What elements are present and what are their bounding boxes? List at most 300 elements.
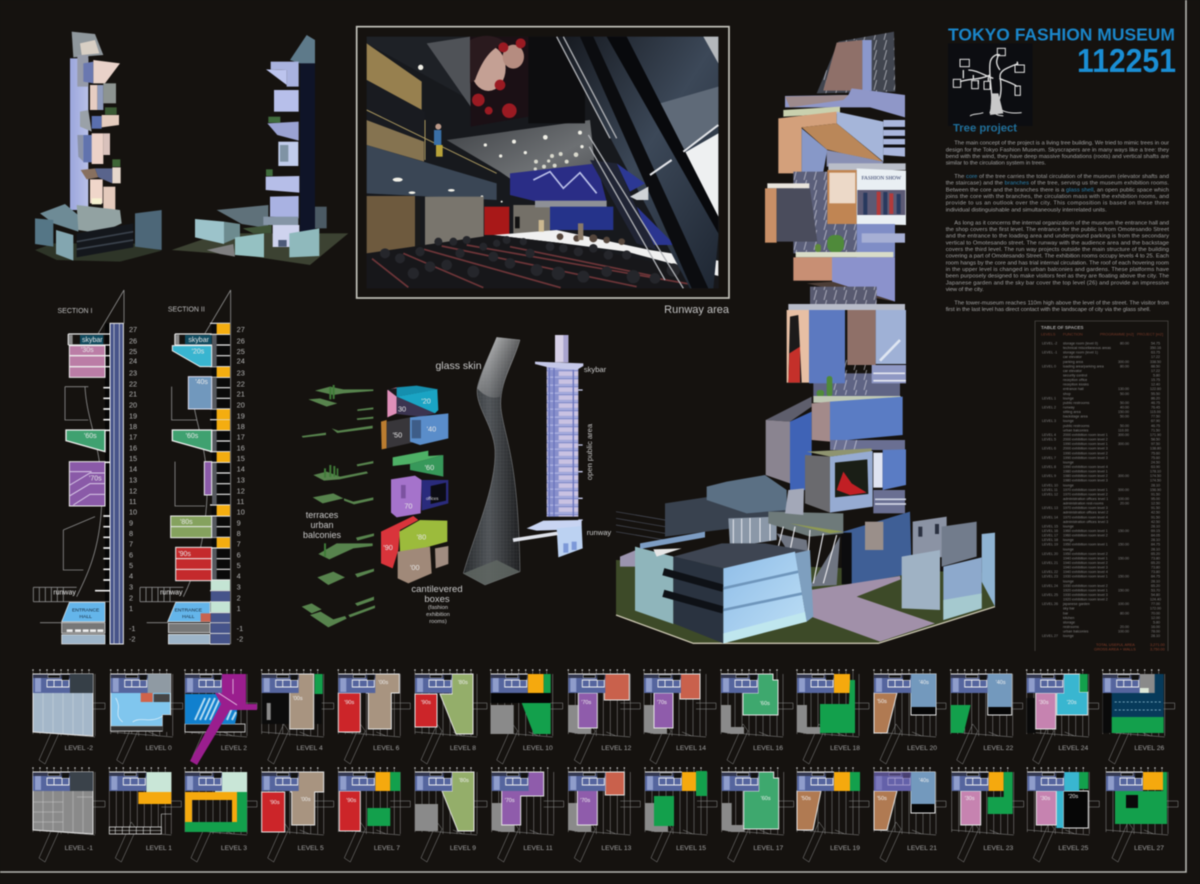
- section II: 12: [237, 486, 245, 495]
- section I: 12: [129, 486, 137, 495]
- boxes 20s and 30s: '20: [421, 396, 431, 405]
- site and base buildings: [616, 475, 995, 643]
- table of spaces: 1970 exhibition room level 2: [1063, 492, 1108, 496]
- table of spaces: 46.75: [1151, 401, 1160, 405]
- table of spaces: 300.00: [1118, 442, 1129, 446]
- table of spaces: 73.80: [1151, 556, 1160, 560]
- box 60s: '60: [425, 463, 434, 472]
- section II: 16: [237, 443, 245, 452]
- box 60s: [393, 451, 443, 477]
- section II: 17: [237, 432, 245, 441]
- table of spaces: LEVEL 14: [1042, 515, 1058, 519]
- project description: joins the core with the branches, the circulation mass with the exhibition rooms, and: [945, 194, 1169, 200]
- plan: level 23: [951, 767, 1024, 862]
- table of spaces: 58.50: [1151, 438, 1160, 442]
- boxes 40s and 50s: [381, 413, 448, 449]
- project description: The tower-museum reaches 110m high above the level of the street. The visitor from: [954, 300, 1169, 306]
- label: cantilevered boxes: cantilevered: [411, 584, 463, 595]
- project description: been purposely designed to make visitors feel as they are floating above the city. The: [946, 274, 1169, 280]
- section I: ENTRANCE: [72, 608, 100, 614]
- table of spaces: LEVEL 3: [1042, 419, 1056, 423]
- tower middle part: [766, 310, 906, 513]
- table of spaces: 1960 exhibition room level 2: [1063, 534, 1108, 538]
- plan: level 8: LEVEL 8: [450, 745, 476, 752]
- section I: [33, 290, 137, 644]
- table of spaces: storage room (level 1): [1063, 351, 1098, 355]
- plan: level -2: LEVEL -2: [65, 745, 93, 752]
- table of spaces: 100.00: [1118, 602, 1129, 606]
- plan: level 7: LEVEL 7: [374, 845, 400, 852]
- title: TOKYO FASHION MUSEUM: [948, 24, 1175, 44]
- table of spaces: 150.00: [1118, 543, 1129, 547]
- plan: level 6: '00s: [378, 680, 388, 686]
- table of spaces: 75.60: [1151, 456, 1160, 460]
- plan: level 0: LEVEL 0: [146, 745, 172, 752]
- plan: level 10: [490, 669, 563, 764]
- table of spaces: 76.45: [1151, 406, 1160, 410]
- label: glass skin: glass skin: [435, 360, 482, 372]
- table of spaces: 91.50: [1151, 506, 1160, 510]
- section II: runway: [160, 590, 183, 597]
- plan: level 5: '90s: [270, 800, 280, 806]
- plan: level 24: [1026, 669, 1099, 764]
- exploded diagram: cantilevered boxes: [381, 386, 448, 583]
- label: skybar: skybar: [584, 365, 607, 374]
- plan: level 6: '90s: [344, 700, 354, 706]
- table of spaces: 138.80: [1150, 447, 1161, 451]
- plan: level 7: [338, 767, 410, 862]
- table of spaces: 28.10: [1151, 634, 1160, 638]
- table of spaces: 77.50: [1151, 415, 1160, 419]
- table of spaces: 1940 exhibition room level 1: [1063, 556, 1108, 560]
- table of spaces: 2000 exhibition room level 2: [1063, 438, 1108, 442]
- table of spaces: urban balconies: [1063, 630, 1089, 634]
- plan: level 3: LEVEL 3: [221, 845, 247, 852]
- section I: 5: [129, 561, 133, 570]
- floor plans, odd levels: [32, 767, 1178, 862]
- plan: level 22: [950, 669, 1023, 764]
- plan: level 19: '50s: [801, 796, 811, 802]
- table of spaces: 1960 exhibition room level 1: [1063, 529, 1108, 533]
- table of spaces: LEVEL 0: [1042, 364, 1056, 368]
- table of spaces: 55.50: [1151, 392, 1160, 396]
- table of spaces: restrooms: [1063, 625, 1079, 629]
- section drawings: [33, 290, 245, 644]
- section II: 21: [237, 390, 245, 399]
- table of spaces: 84.05: [1151, 534, 1160, 538]
- section I: 23: [129, 368, 137, 377]
- section II: 3: [237, 582, 241, 591]
- table of spaces: 54.80: [1151, 593, 1160, 597]
- table of spaces: 40.00: [1120, 406, 1129, 410]
- table of spaces: 1950 exhibition room level 2: [1063, 552, 1108, 556]
- table of spaces: 65.20: [1151, 561, 1160, 565]
- plan: level 14: LEVEL 14: [676, 745, 706, 752]
- plan: level 18: [796, 669, 869, 764]
- project description: The core of the tree carries the total circulation of the museum (elevator shafts and: [954, 174, 1169, 180]
- table of spaces: LEVEL 18: [1042, 538, 1058, 542]
- table of spaces: 20.00: [1120, 502, 1129, 506]
- table of spaces: LEVELS: [1041, 332, 1056, 336]
- table of spaces: 178.10: [1150, 470, 1161, 474]
- table of spaces: 73.80: [1151, 566, 1160, 570]
- project description: As long as it concerns the internal organization of the museum the entrance hall and: [954, 220, 1169, 226]
- section I: 18: [129, 422, 137, 431]
- table of spaces: 88.50: [1151, 364, 1160, 368]
- table of spaces: 174.50: [1150, 479, 1161, 483]
- table of spaces: 80.00: [1120, 342, 1129, 346]
- table of spaces: TABLE OF SPACES: [1041, 325, 1083, 330]
- plan: level 20: '50s: [877, 699, 887, 705]
- table of spaces: LEVEL 1: [1042, 396, 1056, 400]
- table of spaces: 300.00: [1118, 488, 1129, 492]
- table of spaces: 1970 exhibition room level 3: [1063, 506, 1108, 510]
- plan: level 24: '30s: [1039, 700, 1049, 706]
- plan: level 13: LEVEL 13: [601, 845, 632, 852]
- table of spaces: 28.10: [1151, 579, 1160, 583]
- section II: 9: [237, 518, 241, 527]
- table of spaces: 130.00: [1118, 387, 1129, 391]
- table of spaces: 1920 exhibition room level 1: [1063, 588, 1108, 592]
- plan: level 12: '70s: [581, 700, 591, 706]
- table of spaces: LEVEL 9: [1042, 474, 1056, 478]
- table of spaces: 1930 exhibition room level 3: [1063, 593, 1108, 597]
- label: terraces urban balconies: urban: [310, 520, 334, 530]
- section I: 4: [129, 572, 133, 581]
- section I: SECTION I: [58, 308, 93, 315]
- exploded diagram: terraces, urban balconies: [302, 385, 375, 627]
- table of spaces: LEVEL 7: [1042, 456, 1056, 460]
- section II: 26: [237, 336, 245, 345]
- section I: 11: [129, 497, 137, 506]
- table of spaces: 174.50: [1150, 474, 1161, 478]
- table of spaces: 70.00: [1151, 611, 1160, 615]
- table of spaces: 1970 exhibition room level 4: [1063, 515, 1108, 519]
- tower upper part: [765, 32, 906, 310]
- plan: level 1: LEVEL 1: [146, 845, 172, 852]
- section II: 15: [237, 454, 245, 463]
- table of spaces: 100.00: [1118, 630, 1129, 634]
- table of spaces: 1990 exhibition room level 1: [1063, 442, 1108, 446]
- plan: level 8: [414, 669, 487, 764]
- table of spaces: TOTAL USEFUL AREA: [1096, 643, 1135, 647]
- table of spaces: 1970 exhibition room level 1: [1063, 488, 1108, 492]
- project description: Between the core and the branches there is a glass shell, an open public space which: [946, 187, 1169, 193]
- table of spaces: 53.70: [1151, 588, 1160, 592]
- plan: level 4: LEVEL 4: [297, 745, 323, 752]
- table of spaces: 3,750.00: [1150, 648, 1165, 652]
- plan: level 17: '60s: [761, 796, 771, 802]
- table of spaces: LEVEL 8: [1042, 465, 1056, 469]
- table of spaces: LEVEL 4: [1042, 433, 1056, 437]
- table of spaces: sitting area: [1063, 410, 1081, 414]
- plan: level 25: [1026, 767, 1099, 862]
- plan: level 5: LEVEL 5: [298, 845, 324, 852]
- section I: -1: [129, 624, 136, 633]
- table of spaces: LEVEL 21: [1042, 561, 1058, 565]
- table of spaces: 28.10: [1151, 524, 1160, 528]
- plan: level 9: '80s: [459, 778, 469, 784]
- table of spaces: 124.40: [1150, 598, 1161, 602]
- boxes 90s and 80s: '80: [417, 532, 426, 541]
- table of spaces: backstage area: [1063, 415, 1088, 419]
- table of spaces: administration offices level 3: [1063, 520, 1108, 524]
- section II: 18: [237, 422, 245, 431]
- tower upper part: FASHION SHOW: [861, 175, 902, 181]
- table of spaces: 1930 exhibition room level 2: [1063, 584, 1108, 588]
- section II: 5: [237, 561, 241, 570]
- section I: 17: [129, 432, 137, 441]
- plan: level 12: [568, 669, 640, 764]
- table of spaces: 2000 exhibition room level 3: [1063, 447, 1108, 451]
- table of spaces: 1990 exhibition room level 4: [1063, 465, 1108, 469]
- table of spaces: 156.90: [1150, 488, 1161, 492]
- table of spaces: LEVEL -1: [1042, 351, 1057, 355]
- section I: runway: [53, 590, 76, 597]
- plan: level 1: [108, 767, 181, 862]
- plan: level 19: [796, 767, 869, 862]
- plan: level -1: [32, 767, 105, 862]
- section II: '20s: [192, 348, 205, 355]
- table of spaces: 69.15: [1151, 529, 1160, 533]
- table of spaces: 12.00: [1151, 616, 1160, 620]
- table of spaces: 42.50: [1151, 511, 1160, 515]
- section I: 14: [129, 465, 137, 474]
- table of spaces: 300.00: [1118, 360, 1129, 364]
- table of spaces: LEVEL 26: [1042, 602, 1058, 606]
- plan: level 9: [414, 767, 487, 862]
- plan: level 24: '20s: [1067, 700, 1077, 706]
- section I: HALL: [79, 614, 92, 620]
- plan: level 10: LEVEL 10: [523, 745, 553, 752]
- boxes 20s and 30s: 30: [398, 405, 406, 414]
- project description: covers the third level. The run way projects outside the main structure of the building: [946, 247, 1169, 253]
- plan: level 13: '70s: [580, 798, 590, 804]
- section II: ENTRANCE: [175, 608, 203, 614]
- section II: 25: [237, 347, 245, 356]
- plan: level 18: LEVEL 18: [830, 745, 860, 752]
- project description: similar to the circulation system in trees.: [946, 161, 1046, 167]
- plan: level 19: LEVEL 19: [830, 845, 860, 852]
- plan: level 4: '00s: [293, 696, 303, 702]
- boxes 40s and 50s: '50: [393, 430, 402, 439]
- plan: level 25: LEVEL 25: [1058, 845, 1089, 852]
- table of spaces: 80.00: [1120, 364, 1129, 368]
- label: terraces urban balconies: balconies: [303, 530, 342, 540]
- section II: HALL: [182, 614, 195, 620]
- table of spaces: 1980 exhibition room level 2: [1063, 474, 1108, 478]
- boxes 40s and 50s: '40: [427, 425, 436, 434]
- table of spaces: LEVEL 5: [1042, 438, 1056, 442]
- table of spaces: 54.75: [1151, 342, 1160, 346]
- plan: level 15: [644, 767, 717, 862]
- table of spaces: 1980 exhibition room level 1: [1063, 470, 1108, 474]
- plan: level 3: [184, 767, 257, 862]
- section II: 7: [237, 540, 241, 549]
- project description: design for the Tokyo Fashion Museum. Skyscrapers are in many ways like a tree: they: [946, 147, 1169, 153]
- table of spaces: parking area: [1063, 360, 1083, 364]
- plan: level 4: [261, 669, 334, 764]
- table of spaces: 80.00: [1120, 611, 1129, 615]
- table of spaces: car elevator: [1063, 355, 1083, 359]
- plan: level 8: '90s: [421, 700, 431, 706]
- plan: level 6: LEVEL 6: [373, 745, 400, 752]
- project description: vertical to Omotesando street. The runway with the audience area and the backstage: [946, 240, 1169, 246]
- table of spaces: 28.10: [1151, 547, 1160, 551]
- box 70s and offices: [391, 476, 448, 517]
- table of spaces: 17.22: [1151, 369, 1160, 373]
- boxes 00s: [398, 546, 448, 583]
- table of spaces: 97.50: [1151, 442, 1160, 446]
- table of spaces: LEVEL 25: [1042, 593, 1058, 597]
- plan: level 16: [720, 669, 793, 764]
- section I: 7: [129, 540, 133, 549]
- open public area core model: [513, 335, 583, 557]
- section I: 1: [129, 604, 133, 613]
- project description: Japanese garden and the sky bar cover the top level (26) and provide an impressive: [946, 280, 1169, 286]
- table of spaces: 50.00: [1120, 424, 1129, 428]
- table of spaces: 1940 exhibition room level 4: [1063, 570, 1108, 574]
- table of spaces: 300.00: [1118, 474, 1129, 478]
- table of spaces: 150.00: [1118, 588, 1129, 592]
- table of spaces: administration rest-rooms: [1063, 502, 1104, 506]
- table of spaces: 28.10: [1151, 483, 1160, 487]
- section I: 27: [129, 325, 137, 334]
- section I: '60s: [84, 433, 97, 440]
- table of spaces: lounge: [1063, 634, 1074, 638]
- project description: first in the last level has direct contact with the landscape of city via the glass shell.: [946, 307, 1151, 313]
- section II: 24: [237, 357, 245, 366]
- section I: 3: [129, 582, 133, 591]
- project number: 112251: [1077, 42, 1176, 79]
- section II: 11: [237, 497, 244, 506]
- section II: '80s: [180, 519, 193, 526]
- section II: 19: [237, 411, 245, 420]
- table of spaces: lounge: [1063, 419, 1074, 423]
- section I: 15: [129, 454, 137, 463]
- plan: level 27: [1105, 767, 1178, 862]
- plan: level 2: [184, 669, 257, 765]
- section II: '90s: [178, 551, 191, 558]
- table of spaces: entrance hall: [1063, 387, 1084, 391]
- table of spaces: LEVEL 15: [1042, 524, 1058, 528]
- section II: 8: [237, 529, 241, 538]
- section II: 1: [237, 604, 241, 613]
- glass skin: [463, 337, 520, 585]
- table of spaces: 300.00: [1118, 433, 1129, 437]
- project description: covering a part of Omotesando Street. The exhibition rooms occupy levels 4 to 25. Each: [946, 254, 1169, 260]
- table of spaces: 63.75: [1151, 351, 1160, 355]
- table of spaces: LEVEL 20: [1042, 552, 1058, 556]
- section II: 10: [237, 508, 245, 517]
- table of spaces: 95.00: [1151, 497, 1160, 501]
- plan: level 20: '40s: [919, 680, 929, 686]
- section II: SECTION II: [168, 306, 205, 313]
- table of spaces: 91.50: [1151, 515, 1160, 519]
- table of spaces: 46.75: [1151, 424, 1160, 428]
- section I: 20: [129, 400, 137, 409]
- caption: runway area: Runway area: [664, 304, 730, 316]
- section I: 25: [129, 347, 137, 356]
- plan: level 9: LEVEL 9: [450, 845, 476, 852]
- table of spaces: 110.00: [1118, 428, 1129, 432]
- section II: 20: [237, 400, 245, 409]
- section I: 16: [129, 443, 137, 452]
- table of spaces: GROSS AREA + WALLS: [1094, 648, 1136, 652]
- plan: level 21: LEVEL 21: [907, 845, 937, 852]
- label: fashion exhibition rooms: exhibition: [426, 612, 450, 618]
- section I: 21: [129, 390, 137, 399]
- plan: level 0: [110, 669, 183, 764]
- project description: view of the city.: [946, 287, 984, 293]
- table of spaces: public restrooms: [1063, 401, 1090, 405]
- section II: -1: [237, 624, 243, 633]
- project description: the staircase) and the branches of the tree, serving us the museum exhibition rooms.: [946, 181, 1169, 187]
- label: open public area: open public area: [585, 423, 594, 480]
- table of spaces: 1940 exhibition room level 2: [1063, 561, 1108, 565]
- plan: level 17: [721, 767, 794, 862]
- section I: -2: [129, 635, 136, 644]
- plan: level 20: [873, 669, 946, 764]
- table of spaces: lounge: [1063, 396, 1074, 400]
- table of spaces: 150.00: [1118, 529, 1129, 533]
- section I: 24: [129, 357, 137, 366]
- tree project sketch: [948, 43, 1033, 126]
- plan: level 2: LEVEL 2: [221, 745, 247, 752]
- table of spaces: 3,271.00: [1150, 643, 1165, 647]
- table of spaces: bar: [1063, 611, 1069, 615]
- plan: level 25: '20s: [1068, 794, 1078, 800]
- table of spaces: 5.80: [1153, 620, 1160, 624]
- table of spaces: LEVEL 12: [1042, 492, 1058, 496]
- table of spaces: 28.10: [1151, 538, 1160, 542]
- table of spaces: 171.90: [1150, 433, 1161, 437]
- label: fashion exhibition rooms: (fashion: [428, 605, 448, 611]
- main exploded tower render: [765, 32, 906, 310]
- boxes 20s and 30s: [387, 386, 438, 417]
- table of spaces: 2000 exhibition room level 1: [1063, 433, 1108, 437]
- plan: level 11: LEVEL 11: [523, 845, 553, 852]
- table of spaces: 84.75: [1151, 575, 1160, 579]
- plan: level 26: [1102, 669, 1175, 764]
- table of spaces: 100.00: [1118, 497, 1129, 501]
- section II: 23: [237, 368, 245, 377]
- plan: level 27: LEVEL 27: [1134, 845, 1164, 852]
- table of spaces: security control: [1063, 374, 1087, 378]
- table of spaces: 16.00: [1151, 625, 1160, 629]
- table of spaces: LEVEL -2: [1042, 342, 1057, 346]
- floor plans, even levels: [32, 669, 1175, 765]
- plan: level 14: '70s: [657, 700, 667, 706]
- table of spaces: 42.50: [1151, 520, 1160, 524]
- table of spaces: 86.20: [1151, 396, 1160, 400]
- table of spaces: urban balconies: [1063, 428, 1089, 432]
- section I: 6: [129, 550, 133, 559]
- plan: level 25: '30s: [1040, 796, 1050, 802]
- label: terraces urban balconies: terraces: [306, 510, 339, 520]
- table of spaces: lounge: [1063, 547, 1074, 551]
- table of spaces: LEVEL 19: [1042, 543, 1058, 547]
- boxes 00s: '00: [410, 563, 420, 572]
- table of spaces: 1940 exhibition room level 3: [1063, 566, 1108, 570]
- plan: level 11: '70s: [505, 798, 515, 804]
- table of spaces: reception kiosks: [1063, 383, 1089, 387]
- section II: '60s: [186, 433, 199, 440]
- section II: [140, 290, 245, 644]
- table of spaces: 172.00: [1150, 607, 1161, 611]
- table of spaces: lounge: [1063, 483, 1074, 487]
- section II: 22: [237, 380, 245, 389]
